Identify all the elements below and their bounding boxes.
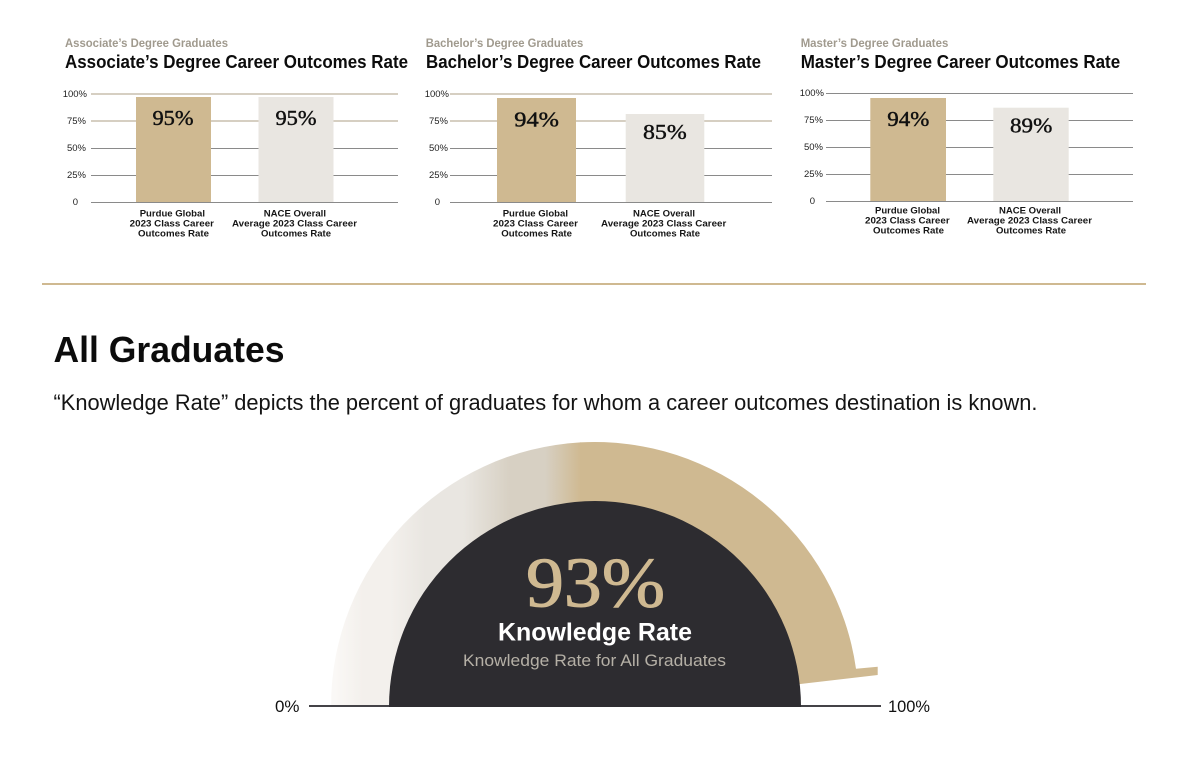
master's grid and axis: 0 xyxy=(810,196,815,207)
associate's heading: Associate’s Degree Career Outcomes Rate xyxy=(65,52,408,72)
associate's Purdue value: 95% xyxy=(152,106,194,130)
bachelor's heading: Bachelor’s Degree Career Outcomes Rate xyxy=(426,52,761,72)
master's heading: Master’s Degree Career Outcomes Rate xyxy=(801,52,1120,72)
bachelor's NACE label: Outcomes Rate xyxy=(630,228,700,240)
associate's NACE label: Outcomes Rate xyxy=(261,228,331,240)
associate's NACE label: Average 2023 Class Career xyxy=(232,218,357,230)
bachelor's Purdue Global bar xyxy=(497,98,576,202)
bachelor's grid and axis: 0 xyxy=(435,197,440,208)
gauge value: 93% xyxy=(526,544,665,622)
associate's grid and axis xyxy=(63,89,398,208)
gauge baseline xyxy=(309,705,881,707)
bachelor's grid and axis xyxy=(425,89,772,208)
associate's grid and axis: 75% xyxy=(67,116,87,127)
associate's NACE value: 95% xyxy=(276,106,316,130)
bachelor's grid and axis: 75% xyxy=(429,116,449,127)
master's NACE bar xyxy=(993,108,1069,201)
master's grid and axis xyxy=(800,88,1133,207)
associate's eyebrow: Associate’s Degree Graduates xyxy=(65,38,228,50)
associate's NACE bar xyxy=(258,97,334,202)
bachelor's NACE bar xyxy=(626,114,704,202)
gauge maximum label: 100% xyxy=(888,698,930,716)
gauge filled arc xyxy=(580,442,878,685)
description text: “Knowledge Rate” depicts the percent of graduates for whom a career outcomes destination is known. xyxy=(54,390,1038,415)
master's grid and axis: 25% xyxy=(804,169,824,180)
bachelor's grid and axis: 50% xyxy=(429,143,449,154)
bachelor's NACE label: NACE Overall xyxy=(633,208,695,220)
gauge faded remainder arc xyxy=(331,442,580,706)
associate's NACE label xyxy=(232,208,357,240)
master's Purdue label: Outcomes Rate xyxy=(873,226,944,236)
associate's grid and axis: 100% xyxy=(63,89,88,100)
associate's Purdue Global bar xyxy=(136,97,211,202)
associate's grid and axis: 25% xyxy=(67,170,87,181)
master's NACE value: 89% xyxy=(1010,114,1052,138)
bachelor's NACE label xyxy=(601,208,727,240)
panel: bachelor's degree chart xyxy=(425,38,772,240)
master's eyebrow: Master’s Degree Graduates xyxy=(801,38,948,50)
bachelor's grid and axis: 100% xyxy=(425,89,450,100)
associate's grid and axis: 0 xyxy=(73,197,78,208)
bachelor's grid and axis: 25% xyxy=(429,170,449,181)
master's Purdue label: Purdue Global xyxy=(875,206,940,216)
master's Purdue label: 2023 Class Career xyxy=(865,216,950,226)
associate's Purdue label: Outcomes Rate xyxy=(138,228,209,240)
master's NACE label: Outcomes Rate xyxy=(996,226,1066,236)
master's NACE label xyxy=(967,206,1092,236)
gauge center semicircle xyxy=(389,501,801,707)
heading: All Graduates: All Graduates xyxy=(54,329,284,370)
master's Purdue value: 94% xyxy=(887,107,929,131)
associate's NACE label: NACE Overall xyxy=(264,208,326,220)
master's Purdue Global bar xyxy=(870,98,946,201)
gauge minimum label: 0% xyxy=(275,698,300,716)
associate's Purdue label: 2023 Class Career xyxy=(130,218,214,230)
gauge chart: knowledge rate xyxy=(275,442,930,716)
bachelor's NACE value: 85% xyxy=(643,120,687,144)
gauge subtitle: Knowledge Rate for All Graduates xyxy=(463,652,726,670)
gauge title: Knowledge Rate xyxy=(498,618,692,646)
master's NACE label: NACE Overall xyxy=(999,206,1061,216)
master's grid and axis: 50% xyxy=(804,142,824,153)
bachelor's Purdue label: 2023 Class Career xyxy=(493,218,578,230)
master's Purdue label xyxy=(865,206,950,236)
bachelor's Purdue label: Purdue Global xyxy=(503,208,568,220)
associate's Purdue label: Purdue Global xyxy=(140,208,205,220)
associate's Purdue label xyxy=(130,208,214,240)
bachelor's NACE label: Average 2023 Class Career xyxy=(601,218,727,230)
associate's grid and axis: 50% xyxy=(67,143,87,154)
panel: associate's degree chart xyxy=(63,38,408,240)
master's grid and axis: 75% xyxy=(804,115,824,126)
panel: master's degree chart xyxy=(800,38,1133,236)
bachelor's Purdue label: Outcomes Rate xyxy=(501,228,572,240)
bachelor's eyebrow: Bachelor’s Degree Graduates xyxy=(426,38,583,50)
bachelor's Purdue value: 94% xyxy=(514,108,559,132)
bachelor's Purdue label xyxy=(493,208,578,240)
master's NACE label: Average 2023 Class Career xyxy=(967,216,1092,226)
master's grid and axis: 100% xyxy=(800,88,825,99)
